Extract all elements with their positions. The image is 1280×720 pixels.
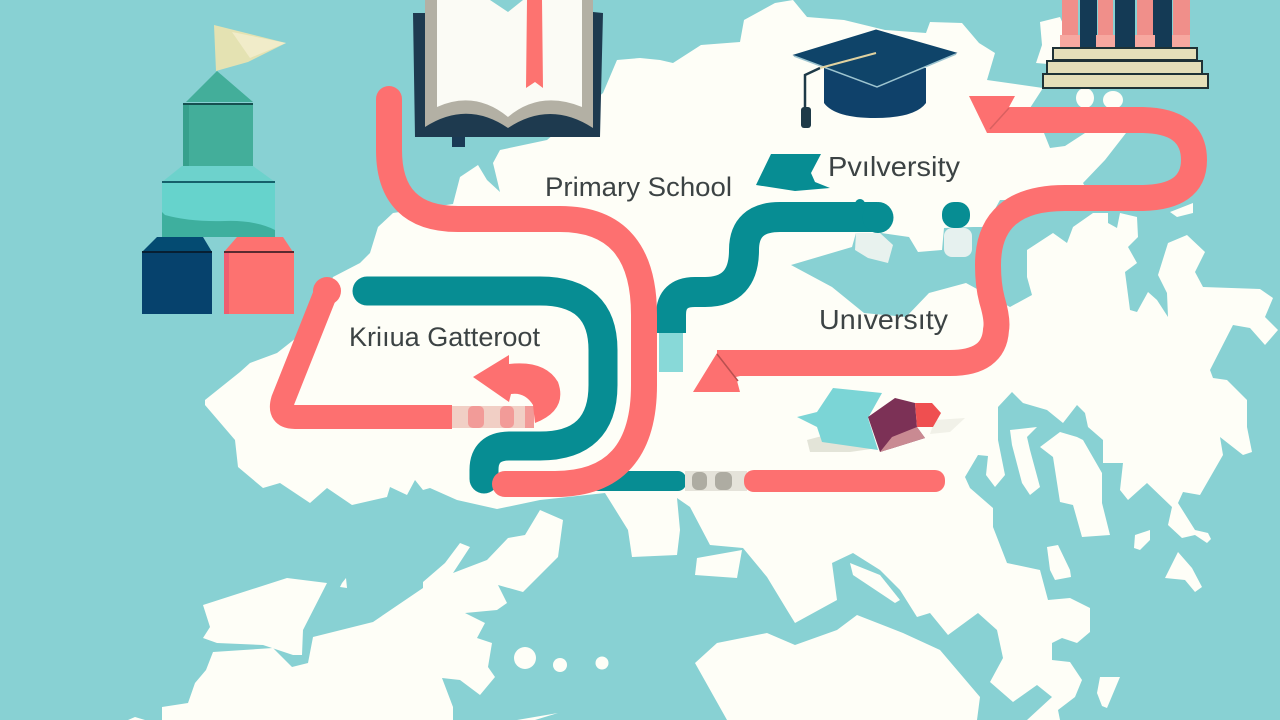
columns <box>1062 0 1190 36</box>
teal flag <box>756 154 830 191</box>
smudge <box>807 436 878 452</box>
page edges <box>425 0 593 128</box>
teal bottom bar <box>590 471 686 491</box>
book tab <box>452 137 465 147</box>
icon: stacked blocks tower <box>142 25 294 314</box>
icon: open book <box>413 0 603 147</box>
inner bay <box>791 200 1093 317</box>
flag <box>214 25 286 71</box>
tower middle block <box>162 166 275 237</box>
island C <box>1047 545 1071 580</box>
pale smudge <box>930 418 965 434</box>
pages <box>437 0 582 117</box>
icon: graduation cap <box>794 30 956 128</box>
label: Primary School: Primary School <box>545 172 732 202</box>
bottom dashes <box>685 471 747 491</box>
light teal segment <box>659 333 683 372</box>
navy block <box>142 237 212 314</box>
teal route: upper branch <box>671 199 894 333</box>
icon: gem and crystal <box>797 388 965 452</box>
book cover <box>413 12 603 137</box>
eastern islands <box>1010 427 1040 495</box>
curved return arrow <box>473 355 560 423</box>
page notch <box>490 0 523 12</box>
coral route: right side with arrowheads <box>693 96 1194 392</box>
dark recesses <box>1080 0 1172 48</box>
cap board <box>794 30 956 87</box>
coral route: from book <box>389 99 644 484</box>
arrowhead lower <box>693 350 740 392</box>
island west <box>203 578 327 655</box>
island F <box>1097 677 1120 708</box>
tassel <box>801 107 811 128</box>
column bases <box>1060 35 1190 48</box>
bookmark <box>526 0 543 88</box>
icon: temple <box>1043 0 1208 88</box>
arrowhead top <box>969 96 1015 133</box>
lower-left land mass <box>162 510 563 720</box>
cord <box>805 68 820 110</box>
island E <box>1165 552 1202 592</box>
label: Unıversıty: Unıversıty <box>819 304 948 335</box>
teal dot <box>942 202 970 228</box>
red facet <box>915 403 941 427</box>
bottom island <box>695 615 980 720</box>
coral bottom bar <box>744 470 945 492</box>
coral block <box>224 237 294 314</box>
teal route: main <box>367 291 603 479</box>
small dot islands <box>128 203 1193 720</box>
steps <box>1043 48 1208 88</box>
coral route: left loop <box>282 277 452 417</box>
island B <box>1040 432 1110 537</box>
left dashes <box>452 406 534 428</box>
faded blob <box>855 233 893 263</box>
label: Kriua Gatteroot: Kriıua Gatteroot <box>349 322 540 352</box>
islets near temple <box>1036 17 1123 109</box>
gem <box>868 398 925 452</box>
tower top block <box>183 71 253 166</box>
narrow island <box>850 563 900 603</box>
faded dot <box>944 228 972 257</box>
island D <box>1134 530 1150 550</box>
label: Pvılversity: Pvılversity <box>828 151 960 182</box>
cap base <box>824 67 926 118</box>
crystal <box>797 388 882 450</box>
